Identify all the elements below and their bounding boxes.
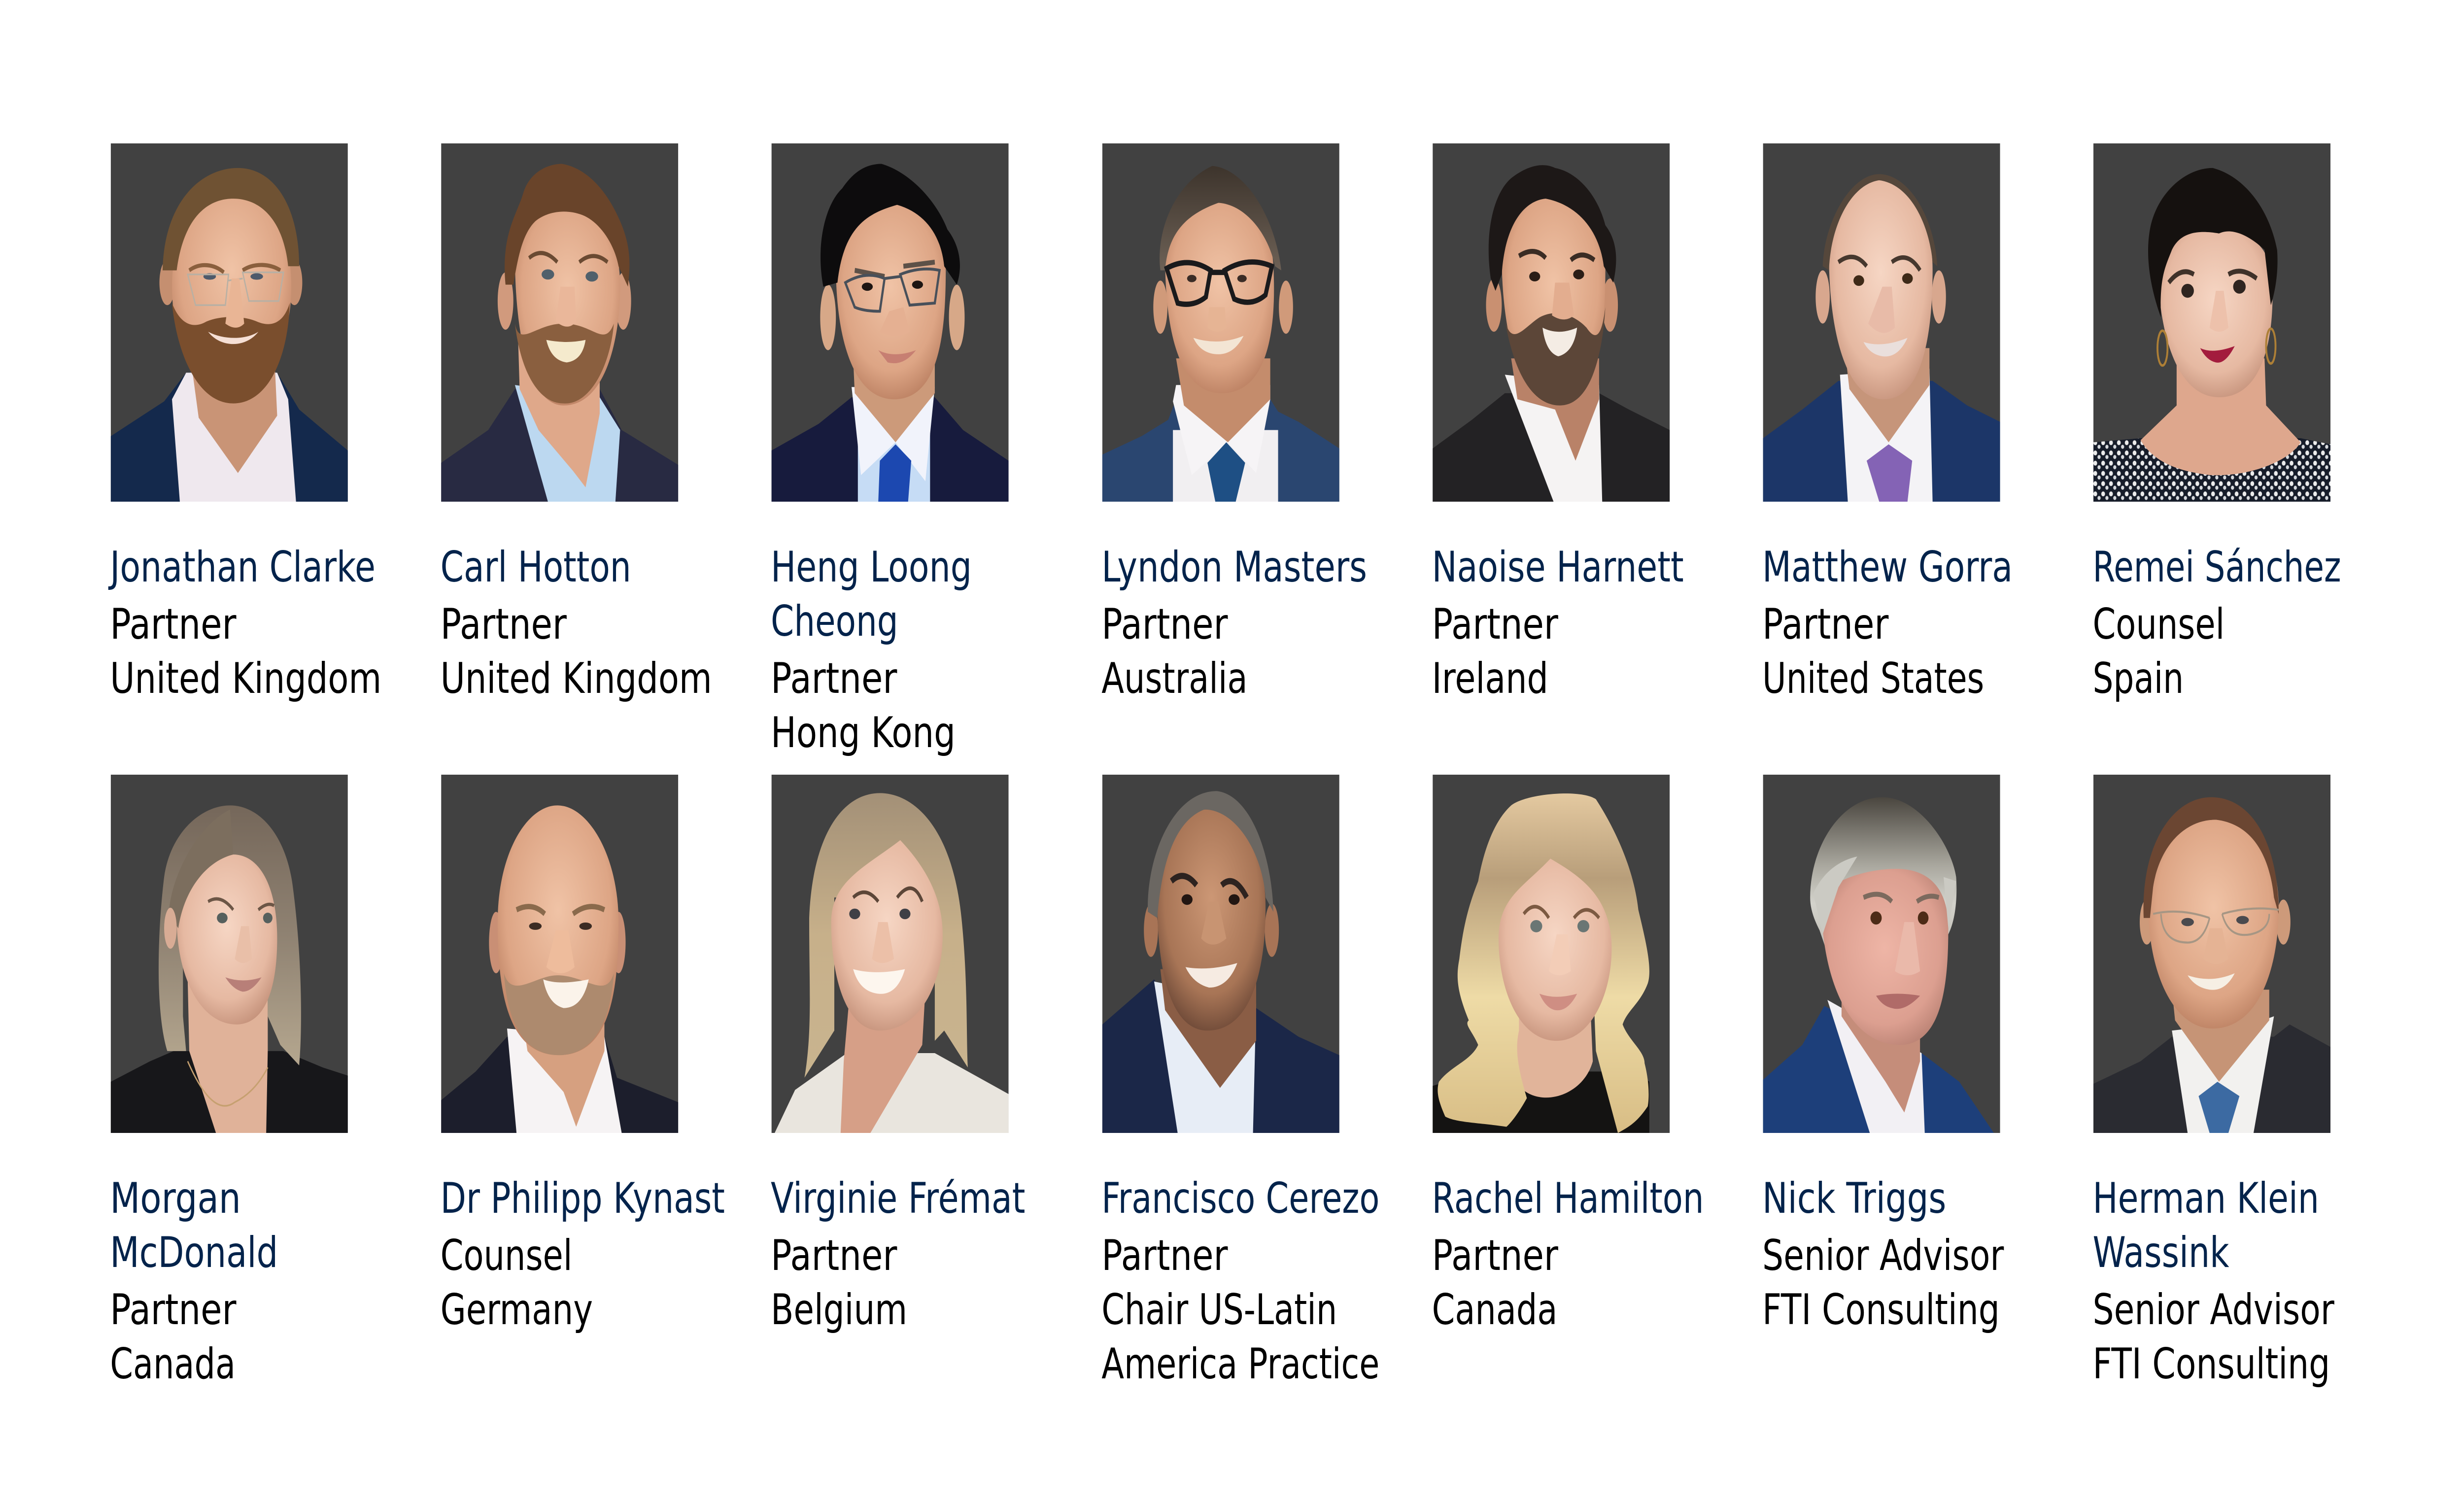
card: Naoise Harnett	[1432, 143, 1684, 703]
role and location: Partner	[1101, 1231, 1228, 1280]
name: Virginie Frémat	[771, 1174, 1026, 1223]
name: Jonathan Clarke	[108, 543, 376, 592]
role and location: Partner	[1432, 600, 1558, 649]
card: Herman Klein Wassink	[2092, 775, 2334, 1389]
role and location	[110, 600, 381, 703]
portrait: Jonathan Clarke	[110, 143, 348, 502]
name	[2092, 1174, 2319, 1277]
name: Lyndon Masters	[1101, 543, 1367, 592]
card: Lyndon Masters	[1101, 143, 1367, 703]
portrait: Dr Philipp Kynast	[441, 775, 678, 1133]
name: McDonald	[110, 1229, 278, 1277]
role and location: Partner	[771, 654, 897, 703]
role and location	[1762, 600, 1984, 703]
role and location: Ireland	[1432, 654, 1548, 703]
portrait: Lyndon Masters	[1102, 143, 1339, 502]
role and location: Canada	[110, 1340, 236, 1389]
name: Carl Hotton	[441, 543, 631, 592]
role and location: United Kingdom	[110, 654, 381, 703]
name: Nick Triggs	[1762, 1174, 1946, 1223]
card: Heng Loong Cheong	[771, 143, 1009, 757]
role and location	[1762, 1231, 2004, 1334]
role and location: Chair US-Latin	[1101, 1286, 1337, 1334]
card: Matthew Gorra	[1762, 143, 2013, 703]
role and location: Counsel	[2092, 600, 2224, 649]
role and location: FTI Consulting	[2092, 1340, 2330, 1389]
name: Matthew Gorra	[1762, 543, 2013, 592]
portrait: Naoise Harnett	[1433, 143, 1670, 502]
name: Wassink	[2092, 1229, 2229, 1277]
role and location: Australia	[1101, 654, 1248, 703]
role and location: Partner	[1432, 1231, 1558, 1280]
role and location: Partner	[110, 600, 237, 649]
portrait: Heng Loong Cheong	[772, 143, 1009, 502]
card: Morgan McDonald	[110, 775, 348, 1389]
name: Naoise Harnett	[1432, 543, 1684, 592]
role and location: Partner	[441, 600, 567, 649]
name: Francisco Cerezo	[1101, 1174, 1379, 1223]
role and location	[1101, 1231, 1379, 1389]
name: Cheong	[771, 597, 898, 646]
card: Jonathan Clarke	[108, 143, 381, 703]
card: Rachel Hamilton	[1432, 775, 1704, 1334]
role and location: Partner	[1101, 600, 1228, 649]
role and location	[1432, 1231, 1558, 1334]
name	[771, 543, 972, 646]
portrait: Morgan McDonald	[110, 775, 348, 1133]
role and location	[1432, 600, 1558, 703]
name: Herman Klein	[2092, 1174, 2319, 1223]
role and location: Belgium	[771, 1286, 907, 1334]
role and location: Partner	[1762, 600, 1889, 649]
role and location: Hong Kong	[771, 709, 956, 757]
role and location: United States	[1762, 654, 1984, 703]
portrait: Rachel Hamilton	[1433, 775, 1670, 1133]
portrait: Francisco Cerezo	[1102, 775, 1339, 1133]
card: Francisco Cerezo	[1101, 775, 1379, 1389]
name: Rachel Hamilton	[1432, 1174, 1704, 1223]
portrait: Herman Klein Wassink	[2093, 775, 2330, 1133]
role and location: FTI Consulting	[1762, 1286, 2000, 1334]
name: Heng Loong	[771, 543, 972, 592]
role and location	[441, 1231, 593, 1334]
role and location: Spain	[2092, 654, 2184, 703]
role and location	[771, 1231, 907, 1334]
role and location: Germany	[441, 1286, 593, 1334]
role and location	[771, 654, 956, 757]
role and location: Senior Advisor	[2092, 1286, 2334, 1334]
role and location	[441, 600, 712, 703]
card: Remei Sánchez	[2092, 143, 2341, 703]
portrait: Remei Sánchez	[2093, 143, 2330, 502]
name: Dr Philipp Kynast	[441, 1174, 725, 1223]
card: Nick Triggs	[1762, 775, 2004, 1334]
role and location	[2092, 1286, 2334, 1389]
name	[110, 1174, 278, 1277]
card: Carl Hotton	[441, 143, 712, 703]
role and location: Canada	[1432, 1286, 1557, 1334]
role and location: America Practice	[1101, 1340, 1379, 1389]
portrait: Nick Triggs	[1763, 775, 2000, 1133]
portrait: Matthew Gorra	[1763, 143, 2000, 502]
role and location: Partner	[110, 1286, 237, 1334]
role and location	[1101, 600, 1248, 703]
card: Dr Philipp Kynast	[441, 775, 725, 1334]
role and location	[2092, 600, 2224, 703]
card: Virginie Frémat	[771, 775, 1026, 1334]
portrait: Virginie Frémat	[772, 775, 1009, 1133]
role and location: Counsel	[441, 1231, 572, 1280]
portrait: Carl Hotton	[441, 143, 678, 502]
name: Remei Sánchez	[2092, 543, 2341, 592]
role and location: United Kingdom	[441, 654, 712, 703]
role and location: Senior Advisor	[1762, 1231, 2004, 1280]
role and location	[110, 1286, 237, 1389]
role and location: Partner	[771, 1231, 897, 1280]
name: Morgan	[110, 1174, 241, 1223]
